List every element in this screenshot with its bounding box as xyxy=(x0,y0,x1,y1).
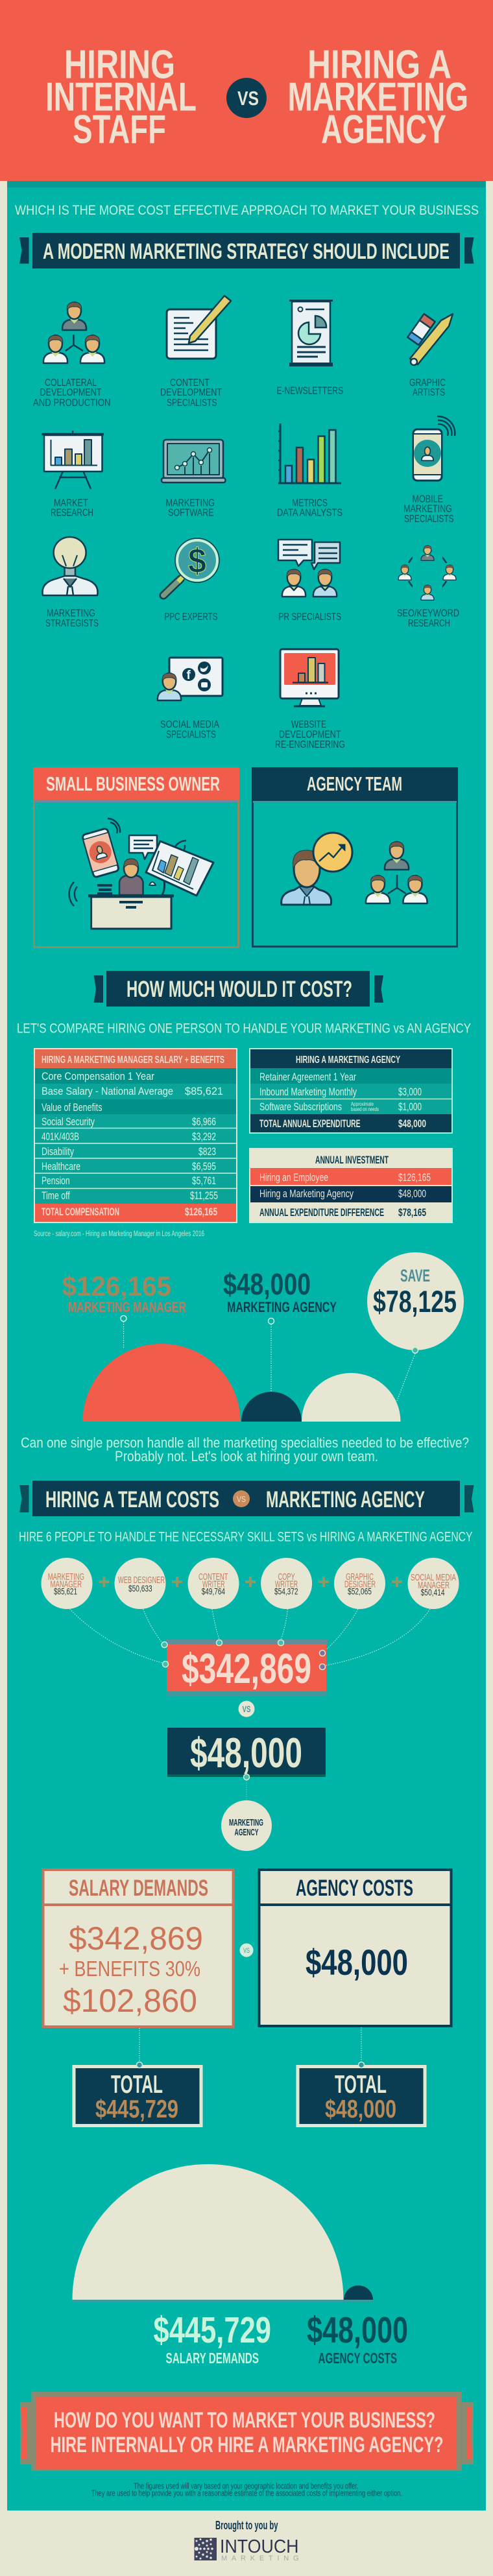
disclaimer xyxy=(91,2481,402,2498)
label: collateral development xyxy=(33,377,110,409)
circle: marketing agency: MARKETING xyxy=(229,1818,263,1828)
label: mobile marketing: MOBILE xyxy=(413,494,443,505)
panel: agency team: AGENCY TEAM xyxy=(307,772,402,795)
label: collateral development: AND PRODUCTION xyxy=(33,398,110,409)
panel: agency costs: AGENCY COSTS xyxy=(296,1876,413,1901)
plus sign xyxy=(392,1577,402,1587)
label: social media specialists: SPECIALISTS xyxy=(166,729,216,741)
circle: marketing agency: AGENCY xyxy=(235,1828,259,1838)
table: marketing manager salary: Social Security xyxy=(42,1115,95,1128)
table: marketing agency costs xyxy=(250,1049,452,1133)
role: content writer: $49,764 xyxy=(202,1586,225,1597)
role: copy writer: WRITER xyxy=(275,1580,298,1590)
table: annual investment: ANNUAL EXPENDITURE DIFFERENCE xyxy=(259,1206,384,1219)
ribbon heading: modern marketing strategy xyxy=(19,233,474,268)
vs badge between panels: VS xyxy=(243,1947,250,1955)
table: marketing manager salary: 401K/403B xyxy=(42,1130,79,1143)
title: hiring internal staff: INTERNAL xyxy=(45,75,197,119)
table: marketing manager salary xyxy=(34,1049,237,1222)
role: social media manager xyxy=(407,1558,459,1609)
total: salary demands: $445,729 xyxy=(95,2095,178,2123)
label: marketing software xyxy=(166,498,215,519)
amount: agency: $48,000 xyxy=(306,1942,408,1983)
role: social media manager: $50,414 xyxy=(421,1588,445,1597)
label: collateral development: DEVELOPMENT xyxy=(40,387,102,398)
ribbon heading: how much would it cost xyxy=(93,971,383,1007)
amount: benefits: $102,860 xyxy=(63,1983,197,2019)
label: marketing software: SOFTWARE xyxy=(168,507,214,519)
stat: agency costs: AGENCY COSTS xyxy=(318,2350,397,2367)
ribbon heading: how much would it cost: HOW MUCH WOULD IT COST? xyxy=(126,977,352,1002)
icon: e-newsletters xyxy=(289,301,333,366)
ribbon heading: hiring a team costs vs marketing agency: HIRING A TEAM COSTS xyxy=(45,1487,219,1512)
table: marketing agency costs: $48,000 xyxy=(398,1117,426,1130)
table: annual investment: Hiring an Employee xyxy=(259,1171,328,1184)
icon: agency lead with growth chart xyxy=(282,833,352,905)
role: marketing manager xyxy=(42,1558,92,1609)
table: marketing manager salary: Core Compensation 1 Year xyxy=(42,1070,154,1082)
role: web designer xyxy=(114,1558,166,1609)
label: metrics data analysts xyxy=(277,498,343,519)
chart: cost comparison semicircles xyxy=(83,1315,418,1422)
icon: social media specialists xyxy=(158,658,222,700)
table: marketing manager salary: $6,966 xyxy=(192,1115,216,1128)
logo: intouch marketing xyxy=(195,2536,298,2562)
icon: social media specialists: f xyxy=(187,669,191,682)
table: marketing agency costs: HIRING A MARKETING AGENCY xyxy=(296,1055,400,1066)
label: seo keyword research: SEO/KEYWORD xyxy=(397,608,459,619)
label: ppc experts: PPC EXPERTS xyxy=(165,612,218,623)
label: website development: DEVELOPMENT xyxy=(279,729,341,741)
amount: salary: $342,869 xyxy=(69,1920,203,1957)
role: marketing manager: MARKETING xyxy=(48,1572,84,1582)
total: agency costs: TOTAL xyxy=(335,2071,387,2099)
call to action banner xyxy=(20,2392,474,2471)
label: marketing strategists: STRATEGISTS xyxy=(45,618,99,629)
total: salary demands xyxy=(74,2062,201,2126)
role: content writer: WRITER xyxy=(202,1580,225,1590)
panel: small business owner: SMALL BUSINESS OWNER xyxy=(46,772,220,795)
label: marketing strategists: MARKETING xyxy=(47,608,95,619)
table: marketing manager salary: $6,595 xyxy=(192,1160,216,1173)
icon: agency team org xyxy=(366,842,427,903)
stat: marketing agency cost: MARKETING AGENCY xyxy=(227,1299,337,1315)
label: social media specialists xyxy=(160,719,220,741)
label: collateral development: COLLATERAL xyxy=(45,377,97,388)
title: hiring internal staff: HIRING xyxy=(64,43,175,87)
logo wordmark: INTOUCH xyxy=(220,2536,298,2557)
circle: marketing agency xyxy=(221,1800,272,1851)
icon: ppc experts magnifier: $ xyxy=(188,542,206,580)
table: annual investment: Hiring a Marketing Agency xyxy=(259,1187,354,1200)
label: website development: RE-ENGINEERING xyxy=(275,739,345,750)
table: marketing agency costs: Approximate xyxy=(351,1101,374,1107)
label: mobile marketing: MARKETING xyxy=(403,503,452,515)
vs badge: VS xyxy=(237,87,259,110)
table: annual investment: $126,165 xyxy=(398,1171,431,1184)
plus sign xyxy=(99,1577,109,1587)
table: marketing agency costs: Retainer Agreement 1 Year xyxy=(259,1071,356,1083)
panel: agency team xyxy=(252,767,458,947)
icon: seo keyword network xyxy=(398,545,456,600)
table: annual investment: ANNUAL INVESTMENT xyxy=(315,1154,389,1166)
table: marketing manager salary: $3,292 xyxy=(192,1130,216,1143)
ribbon heading: hiring a team costs vs marketing agency xyxy=(19,1481,474,1516)
label: seo keyword research: RESEARCH xyxy=(408,618,450,629)
stat: salary demands xyxy=(153,2309,271,2367)
label: content development xyxy=(160,377,222,409)
label: marketing strategists xyxy=(45,608,99,629)
source note: Source - salary.com - Hiring an Marketing Manager in Los Angeles 2016 xyxy=(34,1230,204,1238)
stat: marketing manager cost: $126,165 xyxy=(62,1271,171,1302)
vs badge small: VS xyxy=(237,1494,246,1504)
icon: ppc experts magnifier xyxy=(163,538,219,595)
role: content writer: CONTENT xyxy=(198,1572,228,1582)
table: marketing manager salary: Base Salary - National Average xyxy=(42,1085,173,1097)
table: marketing manager salary: Healthcare xyxy=(42,1160,80,1173)
label: mobile marketing: SPECIALISTS xyxy=(404,514,454,525)
connector: agency cost to agency circle xyxy=(246,1780,247,1800)
icon: marketing software xyxy=(162,440,226,483)
text block: can one person handle it: Probably not. Let's look at hiring your own team. xyxy=(115,1448,378,1464)
stat: marketing manager cost: MARKETING MANAGER xyxy=(68,1299,186,1315)
panel: salary demands xyxy=(43,1870,234,2027)
table: marketing manager salary: Time off xyxy=(42,1189,70,1202)
role: graphic designer xyxy=(334,1558,385,1609)
label: website development: WEBSITE xyxy=(291,719,326,730)
connectors: roles to team total xyxy=(70,1609,430,1665)
panel: small business owner xyxy=(33,767,239,947)
label: content development: CONTENT xyxy=(170,377,210,388)
table: annual investment xyxy=(250,1149,452,1222)
table: marketing manager salary: $126,165 xyxy=(185,1206,217,1218)
role: graphic designer: GRAPHIC xyxy=(346,1572,374,1582)
vs badge xyxy=(226,78,267,118)
title: hiring a marketing agency xyxy=(288,43,468,152)
total: agency costs: $48,000 xyxy=(325,2095,396,2123)
header banner xyxy=(0,0,493,187)
disclaimer: The figures used will vary based on your geographic location and benefits you offer. xyxy=(134,2481,359,2490)
callout: save amount: $78,125 xyxy=(373,1284,457,1318)
table: marketing manager salary: $85,621 xyxy=(185,1085,223,1097)
role: copy writer: $54,372 xyxy=(274,1586,298,1597)
vs badge: VS xyxy=(243,1704,250,1714)
label: market research: RESEARCH xyxy=(51,507,93,519)
table: marketing agency costs: Inbound Marketing Monthly xyxy=(259,1086,357,1098)
total: salary demands: TOTAL xyxy=(111,2071,163,2099)
label: market research: MARKET xyxy=(54,498,88,508)
chart: salary vs agency semicircles xyxy=(73,2164,373,2302)
label: mobile marketing xyxy=(403,494,454,525)
table: marketing agency costs: based on needs xyxy=(351,1106,379,1112)
connector: salary to total xyxy=(139,2028,140,2062)
title: hiring internal staff xyxy=(45,43,197,152)
title: hiring internal staff: STAFF xyxy=(73,108,166,152)
table: marketing manager salary: HIRING A MARKETING MANAGER SALARY + BENEFITS xyxy=(42,1055,224,1066)
table: marketing agency costs: TOTAL ANNUAL EXPENDITURE xyxy=(259,1117,361,1130)
label: graphic artists: GRAPHIC xyxy=(409,377,446,388)
role: marketing manager: $85,621 xyxy=(54,1586,77,1597)
stat: marketing agency cost: $48,000 xyxy=(223,1267,311,1301)
stat: marketing manager cost xyxy=(62,1271,186,1315)
icon: market research xyxy=(42,431,104,489)
plus sign xyxy=(245,1577,256,1587)
table: marketing agency costs: $3,000 xyxy=(398,1086,422,1098)
icon: metrics bar chart xyxy=(278,423,341,483)
plus sign xyxy=(319,1577,329,1587)
icon: content development xyxy=(167,296,231,359)
icon: graphic artists xyxy=(407,314,453,365)
table: marketing agency costs: Software Subscriptions xyxy=(259,1101,342,1113)
stat: agency costs: $48,000 xyxy=(307,2309,408,2351)
role: marketing manager: MANAGER xyxy=(51,1580,82,1590)
role: web designer: WEB DESIGNER xyxy=(118,1575,165,1586)
label: website development xyxy=(275,719,345,750)
icon: pr specialists xyxy=(278,540,340,597)
icon: collateral development xyxy=(43,302,104,363)
stat: salary demands: SALARY DEMANDS xyxy=(166,2350,259,2367)
total box: team cost xyxy=(162,1640,328,1696)
connector: agency to total xyxy=(361,2027,362,2062)
stat: agency costs xyxy=(307,2309,408,2367)
label: e-newsletters: E-NEWSLETTERS xyxy=(276,385,343,397)
label: marketing software: MARKETING xyxy=(166,498,215,508)
icon: solo business owner at desk xyxy=(69,818,213,929)
logo mark xyxy=(195,2538,217,2560)
table: marketing manager salary: TOTAL COMPENSATION xyxy=(42,1206,119,1218)
label: graphic artists: ARTISTS xyxy=(413,387,445,398)
stat: marketing agency cost xyxy=(223,1267,337,1315)
role: graphic designer: $52,065 xyxy=(348,1586,372,1597)
vs badge between panels xyxy=(240,1943,253,1957)
label: content development: DEVELOPMENT xyxy=(160,387,222,398)
label: content development: SPECIALISTS xyxy=(167,398,217,409)
table: marketing manager salary: Value of Benefits xyxy=(42,1101,102,1114)
total box: team cost: $342,869 xyxy=(182,1645,311,1692)
title: hiring a marketing agency: AGENCY xyxy=(321,108,446,152)
label: social media specialists: SOCIAL MEDIA xyxy=(160,719,220,730)
role: content writer xyxy=(188,1558,239,1609)
text block: can one person handle it xyxy=(21,1435,469,1464)
stat: salary demands: $445,729 xyxy=(153,2309,271,2351)
title: hiring a marketing agency: HIRING A xyxy=(307,43,451,87)
role: web designer: $50,633 xyxy=(128,1584,152,1593)
table: marketing manager salary: $823 xyxy=(198,1145,216,1158)
table: annual investment: $78,165 xyxy=(398,1206,426,1219)
vs badge small xyxy=(233,1490,250,1507)
label: seo keyword research xyxy=(397,608,459,629)
label: market research xyxy=(51,498,93,519)
icon: marketing strategists lightbulb xyxy=(42,537,98,595)
label: pr specialists: PR SPECIALISTS xyxy=(279,612,341,623)
icon: mobile marketing xyxy=(413,416,455,481)
total box: agency cost: $48,000 xyxy=(190,1729,302,1776)
total: agency costs xyxy=(298,2062,425,2126)
panel: agency costs xyxy=(259,1870,451,2026)
role: social media manager: SOCIAL MEDIA xyxy=(411,1573,456,1583)
label: metrics data analysts: DATA ANALYSTS xyxy=(277,507,343,519)
role: graphic designer: DESIGNER xyxy=(344,1580,376,1590)
role: social media manager: MANAGER xyxy=(418,1580,450,1591)
callout: save amount: SAVE xyxy=(400,1266,430,1285)
icon: website development monitor xyxy=(280,649,339,706)
vs badge xyxy=(239,1700,254,1717)
label: metrics data analysts: METRICS xyxy=(292,498,328,508)
brought to you by: Brought to you by xyxy=(215,2519,278,2532)
table: marketing manager salary: $5,761 xyxy=(192,1175,216,1187)
amount: benefits label: + BENEFITS 30% xyxy=(59,1957,200,1981)
callout: save amount xyxy=(367,1252,464,1350)
logo tagline: MARKETING xyxy=(221,2555,298,2562)
plus sign xyxy=(172,1577,182,1587)
table: marketing manager salary: $11,255 xyxy=(190,1189,218,1202)
table: marketing agency costs: $1,000 xyxy=(398,1101,422,1113)
role: copy writer xyxy=(261,1558,312,1609)
table: marketing manager salary: Disability xyxy=(42,1145,74,1158)
table: annual investment: $48,000 xyxy=(398,1187,426,1200)
label: graphic artists xyxy=(409,377,446,398)
panel: salary demands: SALARY DEMANDS xyxy=(69,1876,208,1901)
role: copy writer: COPY xyxy=(278,1572,295,1582)
table: marketing manager salary: Pension xyxy=(42,1175,70,1187)
